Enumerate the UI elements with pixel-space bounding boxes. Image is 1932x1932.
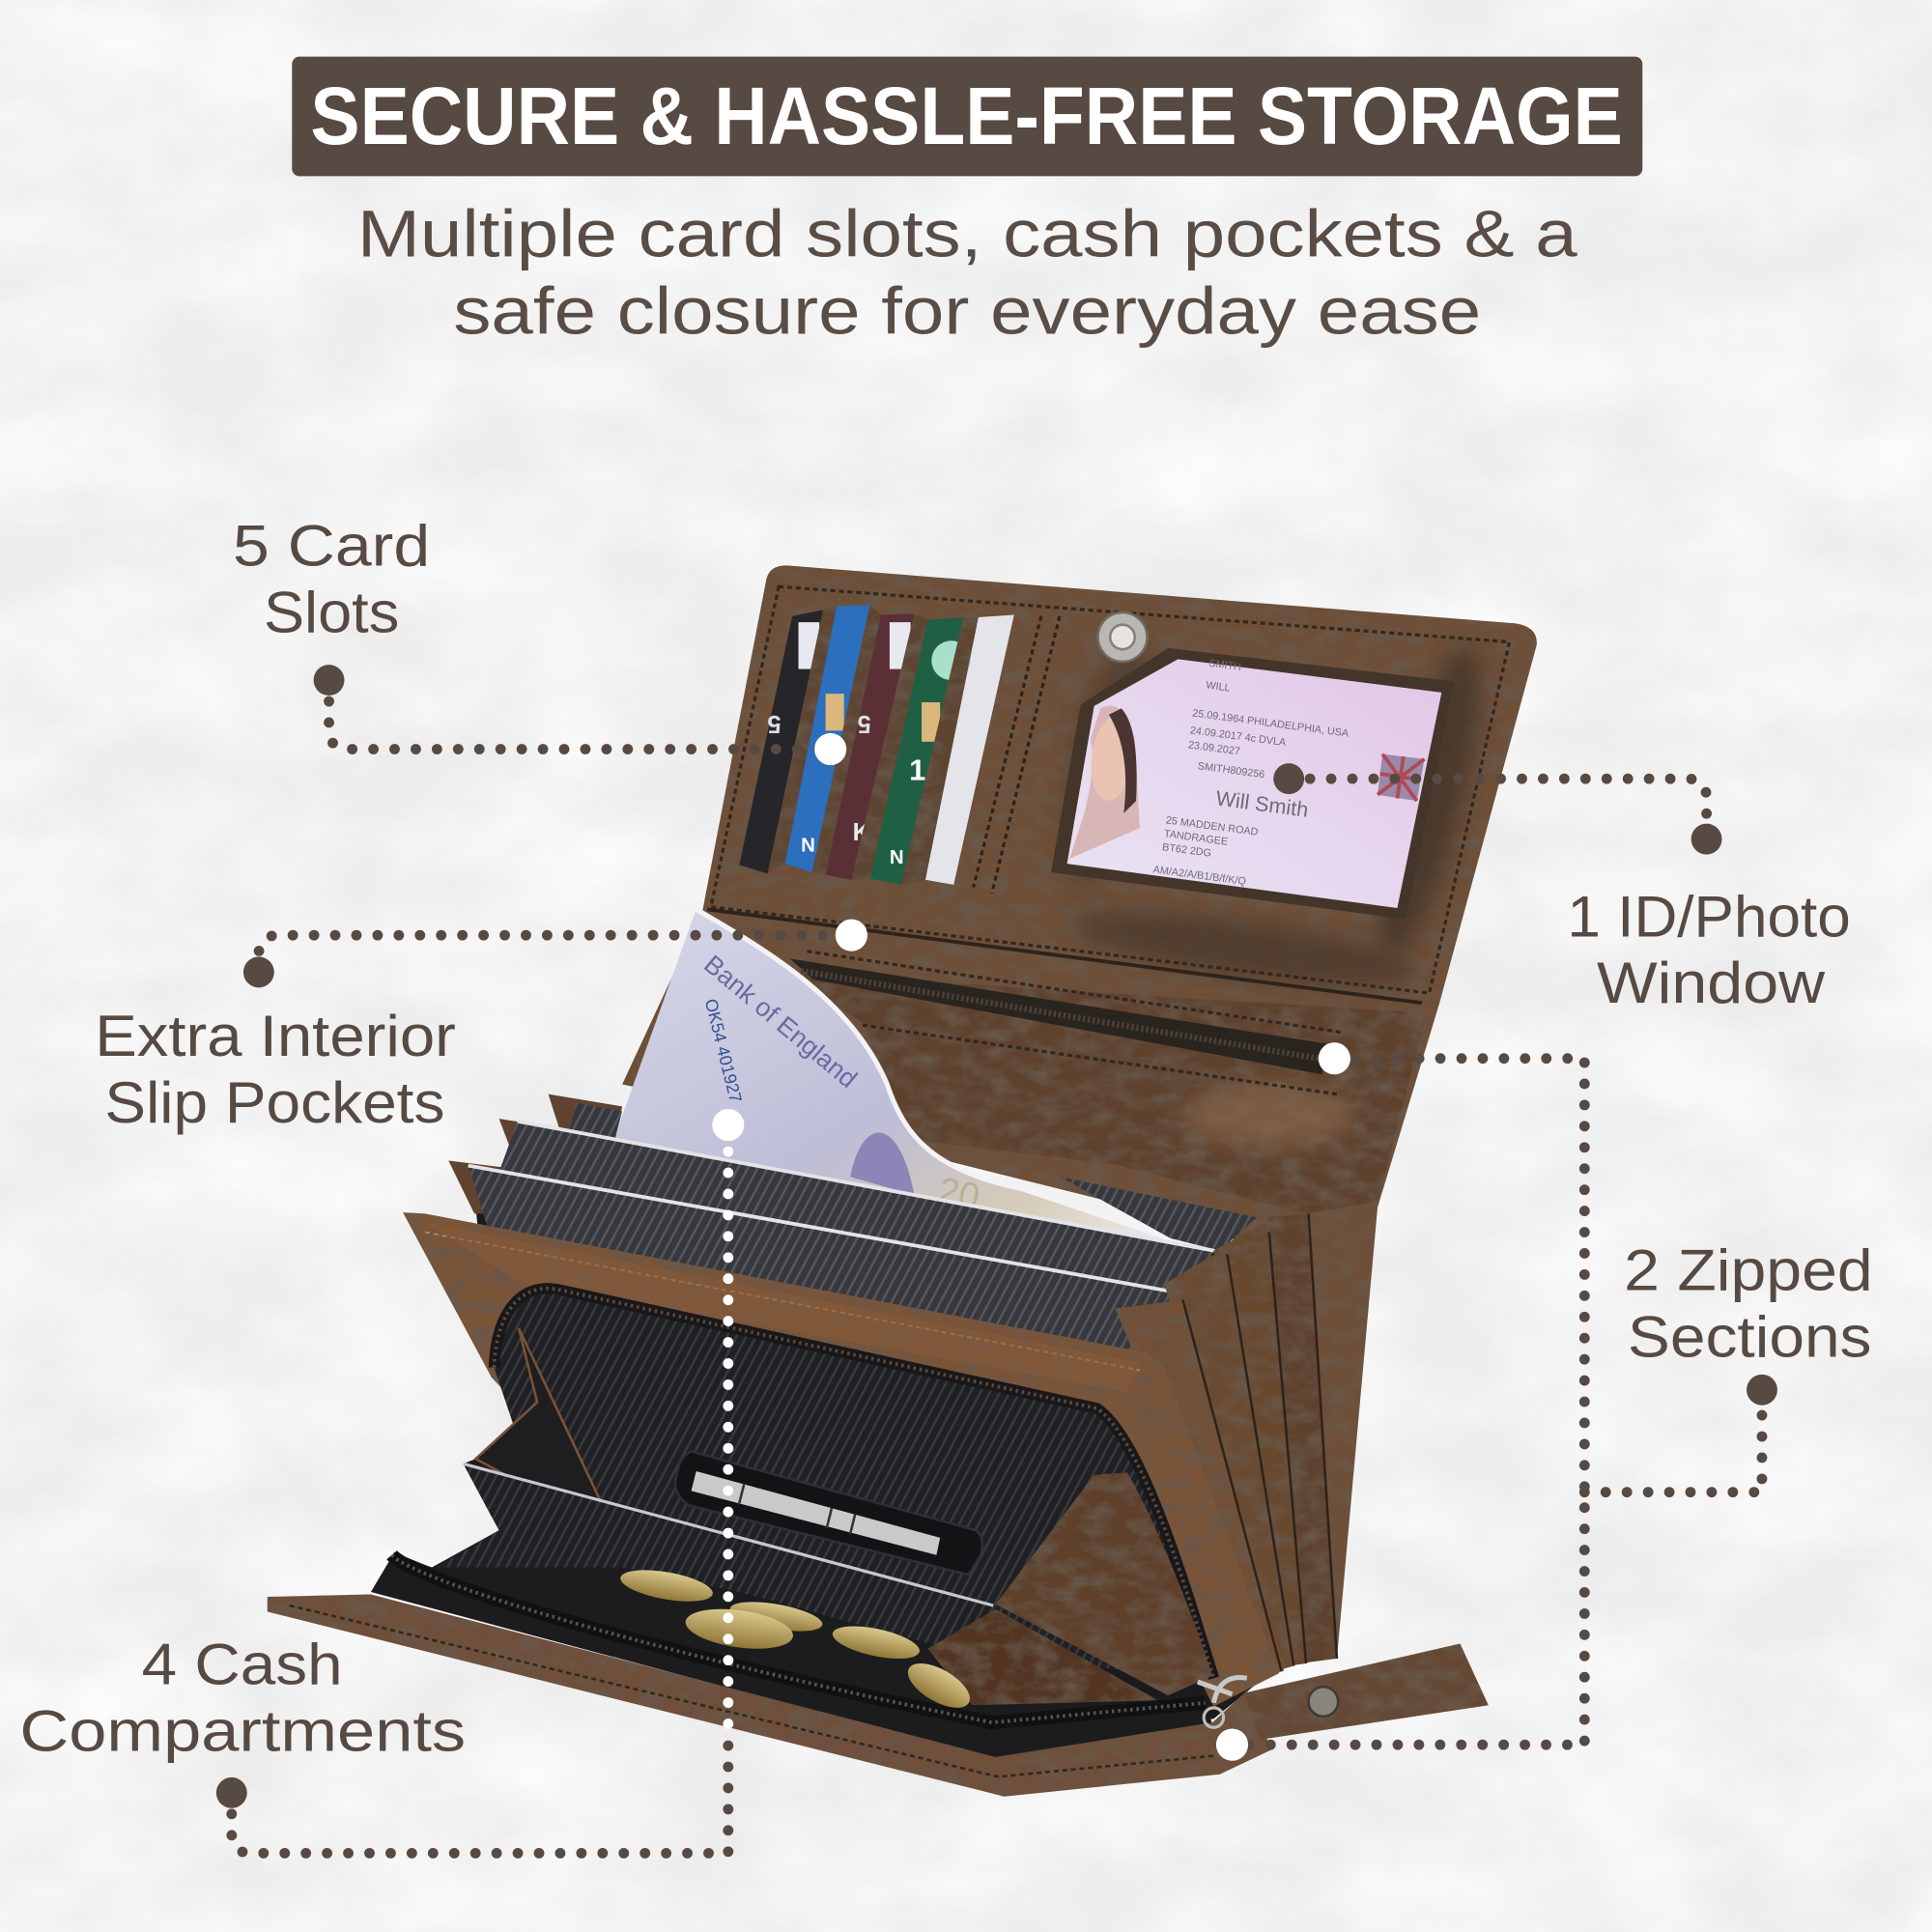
subtitle: safe closure for everyday ease [453,274,1481,349]
label: 4 cash compartments: 4 Cash [142,1633,343,1697]
zip pull strap with rivet [1198,1644,1489,1740]
ID photo window: WILL [1206,679,1231,695]
ID photo window: TANDRAGEE [1163,828,1229,848]
five cards in slots: N [890,847,904,868]
five cards in slots: 5 [767,710,781,737]
banknote [613,909,1180,1242]
ID photo window [1051,648,1454,920]
label: extra interior slip pockets: Extra Interior [95,1004,456,1068]
interior zip [790,958,1325,1074]
five cards in slots: N [801,835,815,856]
ID photo window: BT62 2DG [1161,841,1212,860]
five cards in slots: 5 [858,710,871,737]
ID photo window: Will Smith [1214,785,1310,822]
cash compartment liners and leather tabs [448,1094,1257,1368]
zipped inner pocket lining [475,1289,1213,1678]
gusset seams [1182,1213,1337,1671]
front leather panel [403,1212,1279,1707]
subtitle [357,196,1577,349]
right accordion gussets [1115,1213,1337,1676]
subtitle: Multiple card slots, cash pockets & a [357,196,1577,270]
label: 2 zipped sections: 2 Zipped [1624,1237,1873,1302]
label: 5 card slots: 5 Card [233,513,430,578]
label: extra interior slip pockets [95,1004,456,1135]
bottom leather base [268,1595,1271,1797]
label: 1 ID/photo window: 1 ID/Photo [1567,884,1851,949]
leather dividers between card slots [768,605,979,885]
label: 5 card slots [233,513,430,644]
connector: 5 card slots [314,665,846,765]
ID photo window: 23.09.2027 [1187,739,1241,757]
label: 2 zipped sections [1624,1237,1873,1369]
banknote: Bank of England [698,950,863,1094]
ID photo window: AM/A2/A/B1/B/f/K/Q [1152,864,1247,888]
connector: 1 ID/photo window [1273,763,1722,855]
label: 1 ID/photo window [1567,884,1851,1015]
snap button [1097,612,1148,662]
ID photo window: SMITH809256 [1197,760,1265,781]
ID photo window: 24.09.2017 4c DVLA [1189,724,1288,749]
five cards in slots [739,605,1014,885]
silver metal clip in black case [675,1452,982,1575]
banknote: OK54 401927 [701,997,746,1105]
dark interior backing [392,1182,1282,1737]
label: 4 cash compartments: Compartments [19,1698,466,1763]
five cards in slots: K [853,819,871,846]
label: 4 cash compartments [19,1633,466,1763]
ID photo window: 25 MADDEN ROAD [1165,814,1259,838]
label: 2 zipped sections: Sections [1628,1304,1872,1369]
title banner: SECURE & HASSLE-FREE STORAGE [310,71,1623,161]
wallet photo [268,565,1537,1797]
connector: 4 cash compartments [216,1109,744,1853]
coin pocket wall [429,1463,993,1658]
ID photo window: 25.09.1964 PHILADELPHIA, USA [1192,707,1350,740]
label: 5 card slots: Slots [264,580,399,644]
five cards in slots: 1 [909,753,925,786]
banknote: 20 [935,1169,983,1218]
label: extra interior slip pockets: Slip Pockets [104,1070,444,1135]
right leather flaps [927,1472,1212,1705]
wallet upper flap and back panel [622,565,1537,1663]
coins [618,1564,977,1717]
coin tray [371,1552,1213,1759]
connector: extra interior slip pockets [243,920,867,987]
label: 1 ID/photo window: Window [1597,951,1826,1015]
ID photo window: SMITH [1208,658,1242,673]
connector: 2 zipped sections [1216,1042,1777,1761]
